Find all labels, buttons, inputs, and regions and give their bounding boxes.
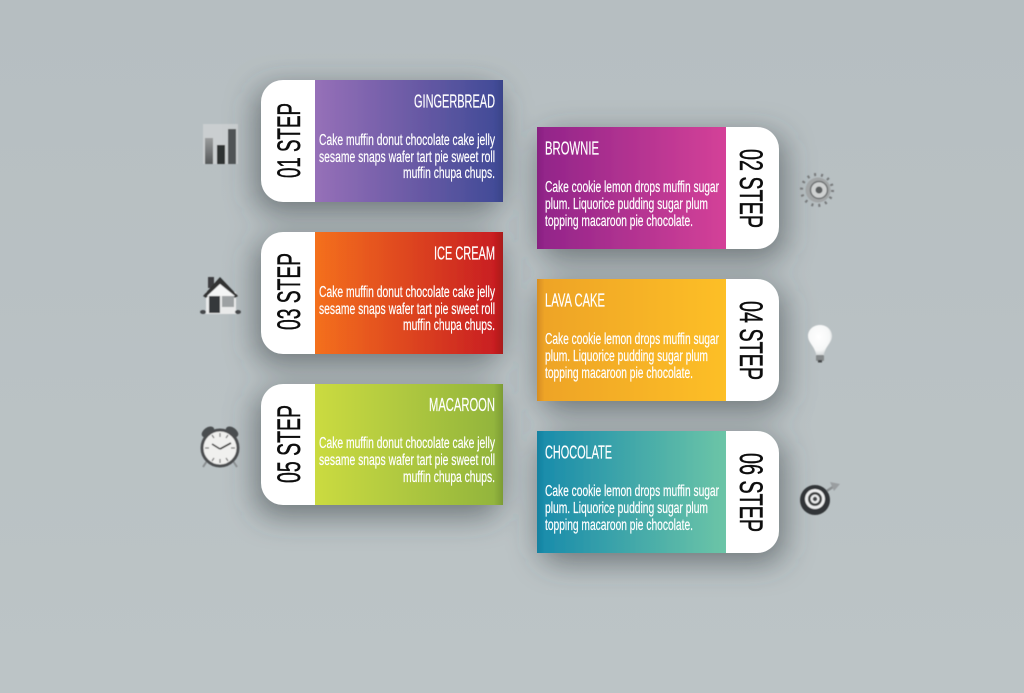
panel: step 05 macaroon: 05 STEP: [271, 405, 307, 483]
panel: step 01 gingerbread: Cake muffin donut chocolate cake jelly: [319, 132, 495, 149]
panel: step 06 chocolate: [537, 431, 779, 553]
panel: step 01 gingerbread: [261, 80, 503, 202]
icon: house: [200, 277, 241, 314]
icon: light bulb: [808, 325, 832, 362]
panel: step 04 lava cake: topping macaroon pie chocolate.: [545, 365, 693, 382]
panel: step 03 ice cream: 03 STEP: [271, 253, 307, 330]
panel: step 06 chocolate: Cake cookie lemon drops muffin sugar: [545, 483, 719, 500]
panel: step 02 brownie: [537, 127, 779, 249]
panel: step 02 brownie: BROWNIE: [545, 138, 599, 158]
panel: step 04 lava cake: Cake cookie lemon drops muffin sugar: [545, 331, 719, 348]
panel: step 04 lava cake: 04 STEP: [733, 301, 769, 380]
panel: step 03 ice cream: [261, 232, 503, 354]
panel: step 03 ice cream: ICE CREAM: [434, 244, 495, 264]
panel: step 02 brownie: topping macaroon pie chocolate.: [545, 213, 693, 230]
icon: dart target: [800, 482, 840, 515]
panel: step 01 gingerbread: sesame snaps wafer tart pie sweet roll: [319, 149, 495, 166]
panel: step 03 ice cream: Cake muffin donut chocolate cake jelly: [319, 284, 495, 301]
panel: step 05 macaroon: muffin chupa chups.: [403, 469, 495, 486]
card shadows: [256, 88, 784, 563]
icon: bar chart: [203, 124, 238, 164]
panel: step 06 chocolate: topping macaroon pie chocolate.: [545, 517, 693, 534]
panel: step 02 brownie: 02 STEP: [733, 149, 769, 228]
panel: step 06 chocolate: plum. Liquorice pudding sugar plum: [545, 500, 708, 517]
panel: step 01 gingerbread: 01 STEP: [271, 103, 307, 178]
panel: step 05 macaroon: MACAROON: [429, 395, 495, 415]
panel: step 03 ice cream: sesame snaps wafer tart pie sweet roll: [319, 301, 495, 318]
icon: gear: [802, 174, 832, 206]
panel: step 02 brownie: Cake cookie lemon drops muffin sugar: [545, 179, 719, 196]
panel: step 01 gingerbread: muffin chupa chups.: [403, 165, 495, 182]
panel: step 05 macaroon: [261, 384, 503, 505]
panel: step 05 macaroon: sesame snaps wafer tart pie sweet roll: [319, 452, 495, 469]
panel: step 03 ice cream: muffin chupa chups.: [403, 317, 495, 334]
panel: step 04 lava cake: [537, 279, 779, 401]
icon: alarm clock: [200, 424, 240, 467]
panel: step 01 gingerbread: GINGERBREAD: [414, 92, 495, 112]
panel: step 04 lava cake: LAVA CAKE: [545, 290, 605, 310]
panel: step 06 chocolate: CHOCOLATE: [545, 442, 612, 462]
panel: step 04 lava cake: plum. Liquorice pudding sugar plum: [545, 348, 708, 365]
panel: step 02 brownie: plum. Liquorice pudding sugar plum: [545, 196, 708, 213]
panel: step 06 chocolate: 06 STEP: [733, 453, 769, 532]
panel: step 05 macaroon: Cake muffin donut chocolate cake jelly: [319, 435, 495, 452]
